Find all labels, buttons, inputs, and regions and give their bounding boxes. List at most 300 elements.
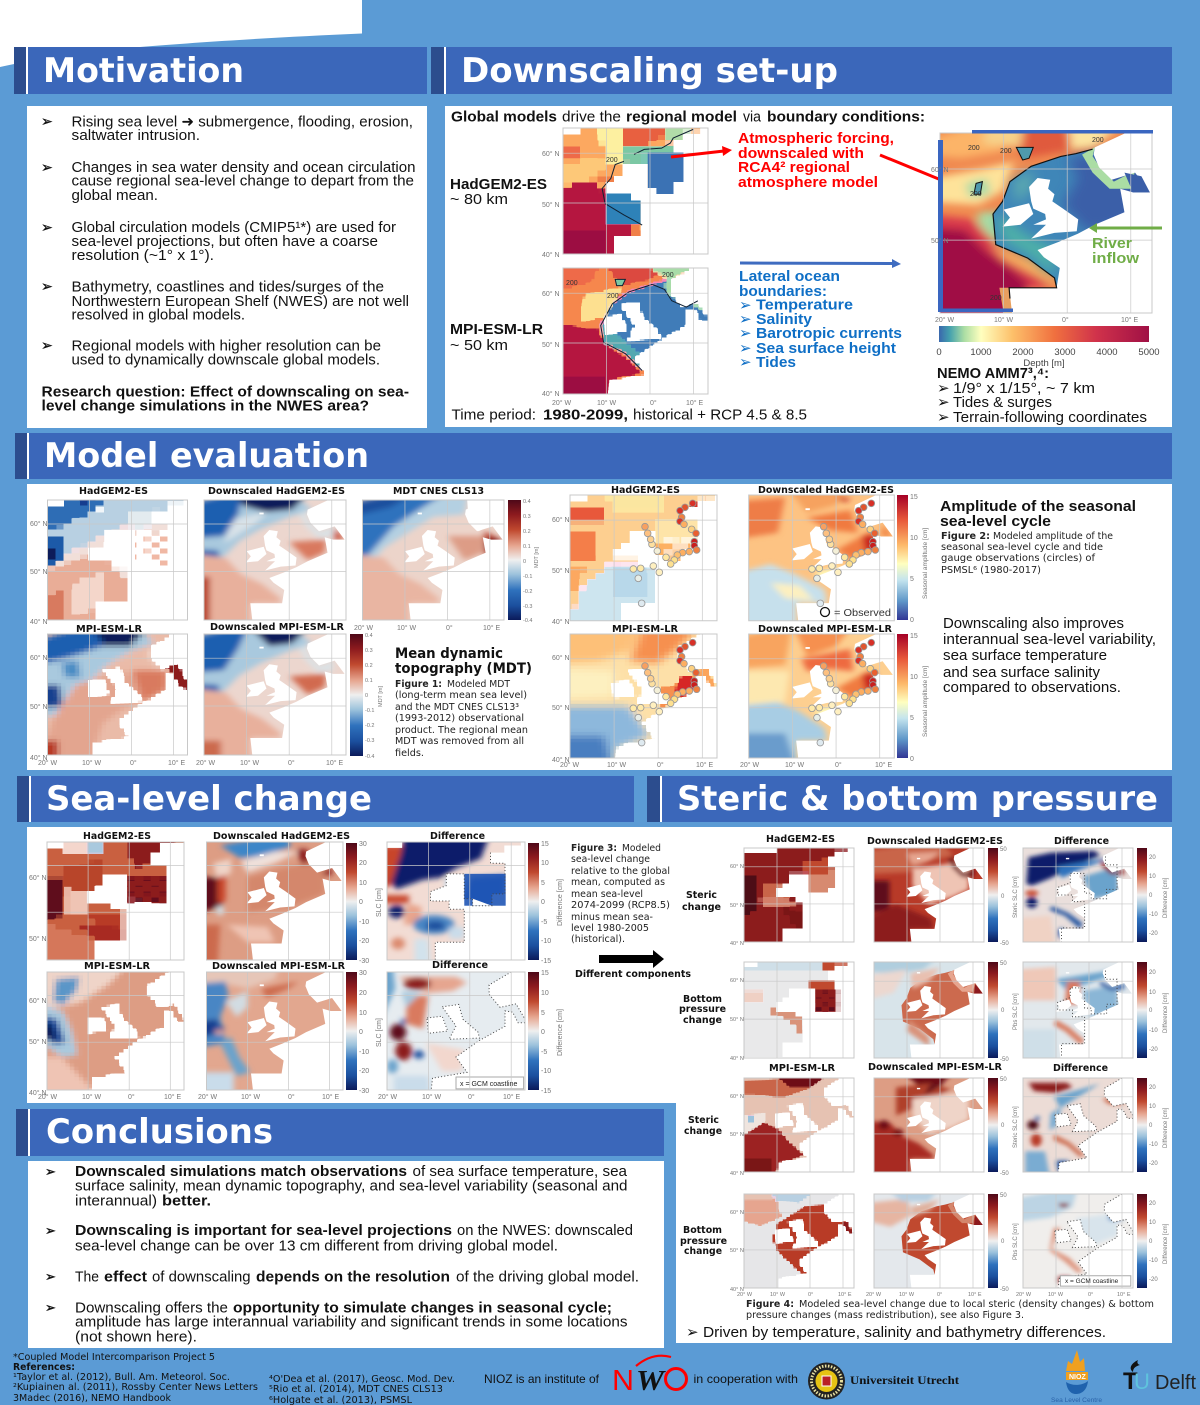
colourbar: SLC bottom: SLC [cm] xyxy=(376,1018,383,1047)
label: river inflow: inflow xyxy=(1092,250,1139,267)
colourbar: SLC bottom: 0 xyxy=(359,1029,363,1036)
steric axis labels: 50° N xyxy=(730,1017,744,1023)
conclusion bullets: interannual) xyxy=(75,1193,157,1210)
map axis labels: 40° N xyxy=(542,251,560,259)
map: NEMO AMM7 bathymetry xyxy=(940,132,1152,314)
SLC axis labels: 20° W xyxy=(198,1093,218,1101)
NEMO map labels: 200 xyxy=(968,145,980,152)
steric colourbars xyxy=(988,847,1169,1293)
callout: atmospheric forcing xyxy=(738,130,894,191)
SLC axis labels: 60° N xyxy=(29,874,47,882)
bullet list: Changes in sea water density and ocean circulation xyxy=(72,159,416,176)
legend: GCM coastline: x = GCM coastline xyxy=(1065,1278,1119,1285)
NEMO domain boundary bars xyxy=(938,130,1153,312)
colourbar: MDT bottom: -0.3 xyxy=(365,738,374,744)
map: bottom pressure difference MPI-ESM-LR xyxy=(1022,1194,1134,1288)
conclusion bullets: The xyxy=(75,1269,99,1286)
map: steric downscaled MPI-ESM-LR xyxy=(874,1078,984,1172)
text: figure 3 caption xyxy=(571,843,670,945)
model label: HadGEM2-ES: ~ 80 km xyxy=(450,191,508,208)
colourbar: SLC top: 0 xyxy=(359,899,363,906)
steric colourbars: -50 xyxy=(1000,1057,1009,1063)
lateral ocean boundaries list xyxy=(739,268,902,371)
seasonal axis labels: 40° N xyxy=(552,756,570,764)
MDT axis labels: 50° N xyxy=(30,703,48,711)
text: seasonal amplitude: PSMSL⁶ (1980-2017) xyxy=(941,565,1041,576)
legend: observed: = Observed xyxy=(834,607,891,619)
colourbar: difference bottom: 0 xyxy=(541,1029,545,1036)
map: SLC HadGEM2-ES xyxy=(47,842,184,960)
heading: conclusions: Conclusions xyxy=(46,1112,273,1152)
steric colourbars: -20 xyxy=(1149,931,1158,937)
map: steric downscaled HadGEM2-ES xyxy=(874,848,984,942)
text: figure 4 caption: pressure changes (mass redistribution), see also Figure 3. xyxy=(746,1310,1024,1321)
MDT axis labels: 40° N xyxy=(30,754,48,762)
map: seasonal downscaled HadGEM2-ES xyxy=(748,494,895,622)
colourbar: MDT bottom: -0.1 xyxy=(365,708,374,714)
text: downscaling also improves: compared to observations. xyxy=(943,679,1121,696)
map axis labels: 50° N xyxy=(542,341,560,349)
steric colourbars: 20 xyxy=(1149,1201,1156,1207)
steric colourbars: Difference [cm] xyxy=(1163,1107,1169,1148)
map axis labels: 40° N xyxy=(542,390,560,398)
conclusion bullets: ➢ xyxy=(45,1270,56,1285)
map titles steric: HadGEM2-ES xyxy=(766,834,835,845)
steric colourbars: 0 xyxy=(1001,894,1005,900)
logo: NWO: W xyxy=(636,1366,666,1397)
text: seasonal amplitude: Modeled amplitude of the xyxy=(993,531,1113,542)
model label: MPI-ESM-LR xyxy=(450,321,543,354)
heading: downscaling set-up xyxy=(431,47,1172,94)
bullet list: Global circulation models (CMIP5¹*) are used for xyxy=(72,219,396,236)
MDT axis labels: 0° xyxy=(446,624,453,632)
map axis labels: 200 xyxy=(566,280,578,287)
steric axis labels: 10° E xyxy=(1117,1292,1131,1298)
seasonal axis labels: 60° N xyxy=(552,654,570,662)
map: seasonal MPI-ESM-LR xyxy=(570,634,718,758)
text: mean dynamic topography: Modeled MDT xyxy=(447,679,510,690)
colourbar: difference bottom: -10 xyxy=(541,1068,551,1075)
colourbar: difference top: -10 xyxy=(541,938,551,945)
colourbar: SLC bottom: -20 xyxy=(359,1068,369,1075)
text: mean dynamic topography: MDT was removed from all xyxy=(395,736,524,747)
research question: level change simulations in the NWES area? xyxy=(42,398,369,414)
depth colourbar: 3000 xyxy=(1054,347,1076,358)
map titles MDT: Downscaled MPI-ESM-LR xyxy=(210,622,344,633)
MDT axis labels: 20° W xyxy=(38,759,58,767)
steric colourbars: 0 xyxy=(1001,1239,1005,1245)
NEMO model description: ➢ xyxy=(937,408,950,426)
footer references: ¹Taylor et al. (2012), Bull. Am. Meteorol. Soc. xyxy=(13,1372,230,1383)
steric colourbars: Steric SLC [cm] xyxy=(1013,876,1019,918)
steric axis labels: 40° N xyxy=(730,1287,744,1293)
conclusion bullets: ➢ xyxy=(45,1224,56,1239)
steric colourbars: -10 xyxy=(1149,1142,1158,1148)
seasonal axis labels: 20° W xyxy=(740,761,760,769)
map: bottom pressure downscaled HadGEM2-ES xyxy=(874,962,984,1058)
map titles MDT: HadGEM2-ES xyxy=(79,486,148,497)
time period: Time period: xyxy=(452,406,536,424)
conclusion bullets xyxy=(45,1163,639,1346)
colourbar: MDT top: -0.4 xyxy=(523,618,532,624)
colourbar: seasonal bottom: 15 xyxy=(910,633,918,640)
steric colourbars: -50 xyxy=(1000,1171,1009,1177)
text: mean dynamic topography: (long-term mean sea level) xyxy=(395,690,527,701)
bullet list: Northwestern European Shelf (NWES) are not well xyxy=(72,293,409,310)
bullet list: Rising sea level ➜ submergence, flooding, erosion, xyxy=(72,114,413,130)
logo: Utrecht University seal xyxy=(808,1362,845,1400)
steric colourbars: 50 xyxy=(1000,961,1007,967)
callout: atmospheric forcing: Atmospheric forcing, xyxy=(738,130,894,147)
NEMO model description: Tides & surges xyxy=(953,394,1052,411)
map titles SLC: HadGEM2-ES xyxy=(83,831,151,842)
colourbar: difference top: 15 xyxy=(541,841,549,848)
MDT axis labels: 10° E xyxy=(326,759,344,767)
row labels: change xyxy=(684,1246,722,1257)
heading: model evaluation xyxy=(15,433,1172,479)
SLC axis labels: 10° E xyxy=(503,1093,521,1101)
logo: TU Delft xyxy=(1123,1360,1196,1395)
colourbar: seasonal top: 15 xyxy=(910,494,918,501)
map: MPI-ESM-LR bathymetry xyxy=(563,268,708,394)
map titles MDT: MPI-ESM-LR xyxy=(76,624,142,635)
steric axis labels: 50° N xyxy=(730,1248,744,1254)
logo: NIOZ sea level centre: Sea Level Centre xyxy=(1051,1398,1103,1404)
lateral ocean boundaries list: ➢ xyxy=(739,310,752,328)
steric colourbars: -50 xyxy=(1000,941,1009,947)
steric colourbars: 10 xyxy=(1149,1220,1156,1226)
heading: model evaluation: Model evaluation xyxy=(44,436,369,476)
callout: atmospheric forcing: downscaled with xyxy=(738,145,864,162)
colourbar: MDT bottom: 0.3 xyxy=(365,648,373,654)
row labels: Bottom xyxy=(683,994,722,1005)
MDT axis labels: 50° N xyxy=(30,568,48,576)
map titles SLC: Downscaled MPI-ESM-LR xyxy=(212,961,345,972)
colourbar: MDT top: -0.1 xyxy=(523,574,532,580)
map: bottom pressure difference HadGEM2-ES xyxy=(1022,962,1134,1058)
text: seasonal amplitude xyxy=(940,498,1136,576)
map titles SLC: MPI-ESM-LR xyxy=(84,961,150,972)
colourbar: SLC bottom: 30 xyxy=(359,970,367,977)
colourbar: MDT top: 0.2 xyxy=(523,529,531,535)
MDT axis labels: 60° N xyxy=(30,520,48,528)
map: bottom pressure HadGEM2-ES xyxy=(744,962,854,1058)
seasonal axis labels: 50° N xyxy=(552,567,570,575)
steric axis labels: 20° W xyxy=(1016,1292,1032,1298)
text: mean dynamic topography: Figure 1: xyxy=(395,679,442,690)
row labels: Steric xyxy=(688,1115,719,1126)
colourbar: MDT top: 0.3 xyxy=(523,514,531,520)
MDT axis labels: 20° W xyxy=(354,624,374,632)
map titles MDT: MDT CNES CLS13 xyxy=(393,486,484,497)
panel: model evaluation xyxy=(15,433,1172,770)
colourbar: difference bottom: 15 xyxy=(541,970,549,977)
row labels: change xyxy=(684,1126,722,1137)
label: different components: Different components xyxy=(575,969,691,980)
map: MDT HadGEM2-ES xyxy=(48,500,188,620)
colourbar: seasonal top: 5 xyxy=(910,576,914,583)
text: figure 3 caption: sea-level change xyxy=(571,854,650,865)
text: mean dynamic topography: Mean dynamic xyxy=(395,646,503,662)
steric axis labels: 10° W xyxy=(1048,1292,1064,1298)
map axis labels: 200 xyxy=(606,157,618,164)
bullet list: ➢ xyxy=(41,160,53,176)
callout: atmospheric forcing: atmosphere model xyxy=(738,174,878,191)
conclusion bullets: better. xyxy=(162,1193,211,1210)
map: MDT downscaled MPI-ESM-LR xyxy=(204,634,346,756)
steric axis labels: 0° xyxy=(1088,1292,1093,1298)
model label: MPI-ESM-LR: ~ 50 km xyxy=(450,337,508,354)
colourbar: seasonal bottom: 5 xyxy=(910,715,914,722)
conclusion bullets: opportunity to simulate changes in seasonal cycle; xyxy=(233,1300,612,1317)
colourbar: MDT bottom: MDT [m] xyxy=(378,686,384,707)
map: SLC difference HadGEM2-ES xyxy=(386,842,526,960)
text: downscaling also improves: interannual sea-level variability, xyxy=(943,631,1156,648)
map titles MDT xyxy=(76,486,484,635)
footer references: *Coupled Model Intercomparison Project 5 xyxy=(13,1352,215,1363)
text: seasonal amplitude: Amplitude of the seasonal xyxy=(940,498,1136,515)
heading: motivation: Motivation xyxy=(43,51,244,91)
colourbar: MDT bottom: 0.4 xyxy=(365,633,373,639)
footer references xyxy=(13,1352,455,1405)
NEMO model description: ➢ xyxy=(937,379,950,397)
intro sentence xyxy=(451,108,925,126)
NEMO map labels: 10° E xyxy=(1121,316,1139,324)
bullet list: ➢ xyxy=(41,220,53,236)
text: figure 3 caption: mean, computed as xyxy=(571,877,665,888)
map titles seasonal xyxy=(611,485,894,635)
steric colourbars: Difference [cm] xyxy=(1163,992,1169,1033)
conclusion bullets: ➢ xyxy=(45,1165,56,1180)
colourbar: MDT top: MDT [m] xyxy=(534,547,540,568)
NEMO model description: ➢ xyxy=(937,393,950,411)
text: seasonal amplitude: Figure 2: xyxy=(941,531,990,542)
colourbar: seasonal top: Seasonal amplitude [cm] xyxy=(922,528,929,599)
bullet list xyxy=(41,114,416,368)
steric axis labels: 60° N xyxy=(730,978,744,984)
map: steric HadGEM2-ES xyxy=(744,848,854,942)
map titles steric xyxy=(766,834,1109,1074)
colourbar: difference top: -5 xyxy=(541,919,547,926)
arrow: lateral boundaries xyxy=(740,259,901,268)
SLC axis labels: 10° W xyxy=(241,1093,261,1101)
arrow: river inflow xyxy=(1089,223,1162,233)
footer references: References: xyxy=(13,1362,75,1373)
row labels: Steric xyxy=(686,890,717,901)
text: figure 3 caption: relative to the global xyxy=(571,866,670,877)
NEMO map labels: 20° W xyxy=(935,316,955,324)
colourbar: SLC top: 20 xyxy=(359,860,367,867)
bullet list: Bathymetry, coastlines and tides/surges of the xyxy=(72,278,384,296)
conclusion bullets: Downscaling is important for sea-level projections xyxy=(75,1222,452,1239)
text: mean dynamic topography xyxy=(395,646,532,759)
map titles seasonal: Downscaled HadGEM2-ES xyxy=(758,485,894,496)
NEMO model description xyxy=(937,365,1147,426)
intro sentence: drive the xyxy=(562,108,621,126)
colourbar: MDT bottom: -0.2 xyxy=(365,723,374,729)
logo: NWO: N xyxy=(612,1365,634,1397)
SLC axis labels: 20° W xyxy=(378,1093,398,1101)
depth colourbar xyxy=(936,326,1160,369)
map axis labels: 10° W xyxy=(597,399,617,407)
footer references: ²Kupiainen al. (2011), Rossby Center News Letters xyxy=(13,1382,258,1393)
colourbar: seasonal top: 10 xyxy=(910,535,918,542)
colourbar: MDT top: -0.3 xyxy=(523,604,532,610)
steric colourbars: 0 xyxy=(1149,1123,1153,1129)
bullet list: global mean. xyxy=(72,187,158,204)
text: seasonal amplitude: seasonal sea-level cycle and tide xyxy=(941,542,1103,553)
map titles steric: Downscaled HadGEM2-ES xyxy=(867,836,1003,847)
arrow: different components xyxy=(599,950,664,968)
steric colourbars: -10 xyxy=(1149,912,1158,918)
MDT axis labels: 40° N xyxy=(30,618,48,626)
logo: TU Delft: T xyxy=(1123,1368,1138,1395)
bullet list: ➢ xyxy=(41,114,53,130)
map axis labels xyxy=(542,150,704,407)
text: seasonal amplitude: gauge observations (circles) of xyxy=(941,553,1096,564)
steric axis labels: 10° W xyxy=(770,1292,786,1298)
colourbar: MDT top xyxy=(508,499,540,624)
text: mean dynamic topography: and the MDT CNES CLS13³ xyxy=(395,702,519,713)
steric colourbars: 0 xyxy=(1149,893,1153,899)
MDT axis labels: 10° E xyxy=(168,759,186,767)
colourbar: difference top: 10 xyxy=(541,860,549,867)
map titles SLC: Difference xyxy=(432,960,488,971)
map titles seasonal: HadGEM2-ES xyxy=(611,485,680,496)
observation circles xyxy=(630,500,879,746)
colourbar: MDT top: 0.1 xyxy=(523,544,531,550)
colourbar: difference top: Difference [cm] xyxy=(557,879,564,926)
colourbar: seasonal bottom xyxy=(897,633,929,763)
seasonal axis labels: 0° xyxy=(835,761,842,769)
steric colourbars: 0 xyxy=(1001,1123,1005,1129)
colourbar: seasonal top: 0 xyxy=(910,617,914,624)
steric axis labels: 20° W xyxy=(737,1292,753,1298)
row labels: change xyxy=(683,1015,722,1026)
SLC axis labels: 10° E xyxy=(164,1093,182,1101)
heading: conclusions xyxy=(16,1109,664,1156)
steric colourbars: 0 xyxy=(1001,1008,1005,1014)
colourbar: difference bottom: 10 xyxy=(541,990,549,997)
intro sentence: Global models xyxy=(451,108,557,126)
conclusion bullets: on the NWES: downscaled xyxy=(457,1222,633,1239)
steric colourbars: 50 xyxy=(1000,1077,1007,1083)
SLC axis labels: 10° W xyxy=(82,1093,102,1101)
map: SLC downscaled HadGEM2-ES xyxy=(206,842,344,960)
MDT axis labels: 10° W xyxy=(240,759,260,767)
footer references: ⁵Rio et al. (2014), MDT CNES CLS13 xyxy=(269,1384,443,1395)
MDT axis labels: 10° W xyxy=(82,759,102,767)
conclusion bullets: sea-level change can be over 13 cm different from driving global model. xyxy=(75,1238,558,1255)
MDT axis labels: 0° xyxy=(130,759,137,767)
seasonal axis labels: 10° E xyxy=(696,761,714,769)
map axis labels: 200 xyxy=(607,293,619,300)
text: NIOZ institute: NIOZ is an institute of xyxy=(484,1372,600,1386)
depth colourbar: 1000 xyxy=(970,347,992,358)
row labels: pressure xyxy=(679,1004,726,1015)
map axis labels: 60° N xyxy=(542,290,560,298)
SLC axis labels: 0° xyxy=(128,1093,135,1101)
row labels: Bottom xyxy=(683,1225,722,1236)
logo: NIOZ sea level centre: NIOZ xyxy=(1069,1374,1086,1381)
heading: downscaling set-up: Downscaling set-up xyxy=(461,51,838,91)
NEMO model description: Terrain-following coordinates xyxy=(953,409,1147,426)
callout: atmospheric forcing: RCA4² regional xyxy=(738,159,850,176)
row labels: pressure xyxy=(680,1236,727,1247)
depth colourbar: 5000 xyxy=(1138,347,1160,358)
steric colourbars: 20 xyxy=(1149,970,1156,976)
steric colourbars: Pbs SLC [cm] xyxy=(1013,993,1019,1030)
NEMO model description: NEMO AMM7³,⁴: xyxy=(937,365,1049,382)
colourbar: difference top xyxy=(528,841,564,965)
legend: GCM coastline: x = GCM coastline xyxy=(460,1081,517,1088)
lateral ocean boundaries list: Salinity xyxy=(756,311,813,328)
steric colourbars: -20 xyxy=(1149,1047,1158,1053)
steric colourbars: 10 xyxy=(1149,874,1156,880)
steric axis labels: 10° W xyxy=(899,1292,915,1298)
bullet list: cause regional sea-level change to depart from the xyxy=(72,172,414,190)
row labels: change xyxy=(682,902,721,913)
bullet list: saltwater intrusion. xyxy=(72,127,200,144)
steric colourbars: 10 xyxy=(1149,990,1156,996)
map: SLC downscaled MPI-ESM-LR xyxy=(206,972,344,1090)
colourbar: SLC bottom xyxy=(346,970,383,1095)
steric axis labels: 20° W xyxy=(866,1292,882,1298)
colourbar: difference top: 5 xyxy=(541,880,545,887)
panel: sea-level change xyxy=(17,776,1172,1103)
bullet list: ➢ xyxy=(41,338,53,354)
heading: motivation xyxy=(14,47,427,94)
NEMO model description: 1/9° x 1/15°, ~ 7 km xyxy=(953,380,1095,397)
model label: HadGEM2-ES xyxy=(450,176,547,208)
colourbar: seasonal bottom: Seasonal amplitude [cm] xyxy=(922,666,929,737)
panel: steric and bottom pressure xyxy=(647,776,1172,1343)
seasonal axis labels: 10° E xyxy=(875,761,893,769)
conclusion bullets: of the driving global model. xyxy=(456,1269,639,1286)
research question xyxy=(42,384,409,414)
map axis labels: 60° N xyxy=(542,150,560,158)
text: driven by: Driven by temperature, salinity and bathymetry differences. xyxy=(703,1324,1106,1341)
MDT axis labels: 10° W xyxy=(397,624,417,632)
steric axis labels: 0° xyxy=(808,1292,813,1298)
bullet list: sea-level projections, but often have a coarse xyxy=(72,233,378,250)
map: steric difference HadGEM2-ES xyxy=(1022,848,1134,942)
map titles steric: Difference xyxy=(1054,836,1109,847)
text: mean dynamic topography: topography (MDT) xyxy=(395,661,532,677)
model label: MPI-ESM-LR: MPI-ESM-LR xyxy=(450,321,543,338)
colourbar: SLC top: -10 xyxy=(359,919,369,926)
SLC axis labels: 10° W xyxy=(422,1093,442,1101)
text: mean dynamic topography: product. The regional mean xyxy=(395,725,528,736)
colourbar: MDT bottom: -0.4 xyxy=(365,754,374,760)
map titles SLC: Difference xyxy=(430,831,485,842)
conclusion bullets: surface salinity, mean dynamic topography, and sea-level variability (seasonal and xyxy=(75,1178,628,1195)
steric colourbars: 20 xyxy=(1149,855,1156,861)
conclusion bullets: (not shown here). xyxy=(75,1329,197,1346)
text: Universiteit Utrecht: Universiteit Utrecht xyxy=(850,1373,959,1387)
map axis labels: 0° xyxy=(650,399,657,407)
logo: NIOZ sea level centre xyxy=(1051,1350,1103,1404)
text: figure 4 caption xyxy=(746,1299,1154,1321)
map: bottom pressure MPI-ESM-LR xyxy=(744,1194,854,1288)
text: driven by: ➢ xyxy=(686,1323,699,1341)
lateral ocean boundaries list: boundaries: xyxy=(739,283,827,300)
bullet list: resolved in global models. xyxy=(72,306,245,324)
colourbar: SLC top: 30 xyxy=(359,841,367,848)
depth colourbar: 4000 xyxy=(1096,347,1118,358)
map: SLC difference MPI-ESM-LR xyxy=(386,972,526,1090)
MDT axis labels: 60° N xyxy=(30,654,48,662)
